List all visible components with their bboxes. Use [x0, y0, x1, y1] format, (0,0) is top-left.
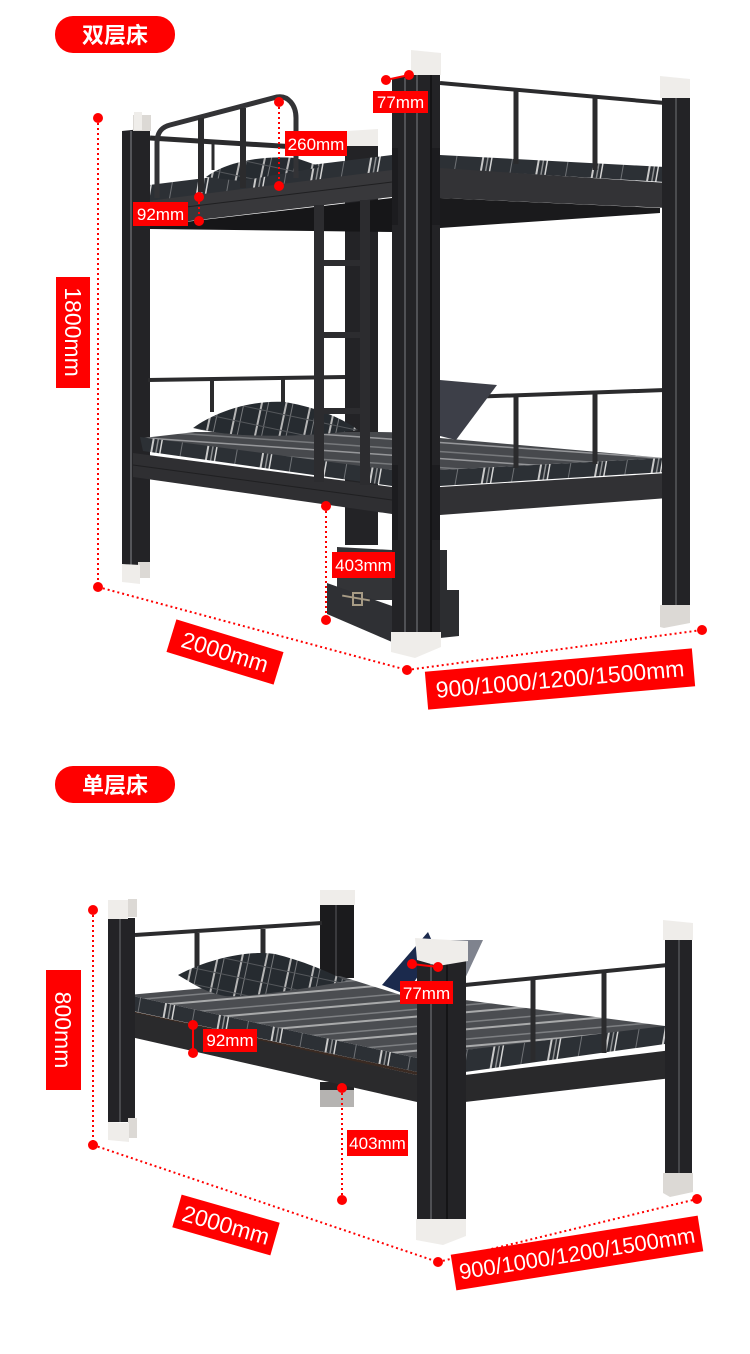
dimension: length 2000mm: 2000mm: [178, 626, 272, 678]
back posts: [320, 890, 355, 1107]
mattress: [122, 976, 665, 1075]
dimension: width options: 900/1000/1200/1500mm: [457, 1222, 697, 1284]
callout: under-bed 403mm: 403mm: [349, 1134, 406, 1153]
centre post: [391, 50, 441, 658]
callout: guard rail 260mm: 260mm: [288, 135, 344, 154]
callout: frame 92mm: 92mm: [137, 205, 184, 224]
lower bunk guard rails: [148, 377, 665, 468]
callout: guard rail 260mm: [274, 97, 347, 191]
back post and storage: [327, 129, 459, 642]
navy pillow: [382, 932, 483, 1000]
panel: single bed section: [46, 766, 703, 1290]
panel: bunk bed section: [55, 16, 707, 710]
heading pill: double-layer bed: [55, 16, 175, 53]
callout: frame 92mm: 92mm: [206, 1031, 254, 1050]
dimension: height 1800mm: 1800mm: [60, 287, 86, 377]
callout: under-bed 403mm: [337, 1083, 408, 1205]
upper bunk guard rail: [157, 97, 296, 198]
head rail: [135, 923, 322, 972]
left post: [122, 112, 151, 584]
dimension: width options: [402, 625, 707, 710]
callout: frame 92mm: [133, 192, 204, 226]
foot guard rail: [465, 965, 668, 1062]
dimension: length 2000mm: 2000mm: [179, 1200, 273, 1250]
dimension: height 1800mm: [56, 113, 103, 587]
heading pill: double-layer bed: 双层床: [82, 23, 148, 48]
upper bunk right frame: [440, 83, 668, 228]
ladder: [314, 200, 370, 485]
dimension: width options: 900/1000/1200/1500mm: [435, 655, 685, 703]
callout: post 77mm: [373, 70, 428, 113]
dimension: length 2000mm: [88, 1140, 438, 1262]
callout: post 77mm: 77mm: [377, 93, 424, 112]
frame: [122, 1010, 672, 1102]
single bed illustration: [108, 890, 693, 1245]
upper pillow: [206, 157, 322, 181]
right post: [660, 76, 690, 628]
upper bunk left rail and mattress: [140, 138, 392, 232]
heading pill: single-layer bed: [55, 766, 175, 803]
callout: under-bed 403mm: [321, 501, 395, 625]
dimension: height 800mm: [46, 905, 98, 1145]
heading pill: single-layer bed: 单层床: [82, 773, 148, 798]
centre post: [415, 938, 468, 1245]
callout: post 77mm: 77mm: [403, 984, 450, 1003]
bunk bed illustration: [122, 50, 690, 658]
pillow: [178, 953, 346, 996]
lower pillows: [193, 380, 497, 440]
right post: [663, 920, 693, 1197]
lower bunk mattress and frame: [133, 432, 668, 515]
dimension: height 800mm: 800mm: [50, 992, 76, 1068]
callout: frame 92mm: [188, 1020, 257, 1058]
dimension: width options: [433, 1194, 703, 1290]
callout: post 77mm: [400, 959, 453, 1004]
left post: [108, 899, 137, 1142]
callout: under-bed 403mm: 403mm: [335, 556, 392, 575]
dimension: length 2000mm: [93, 582, 407, 685]
